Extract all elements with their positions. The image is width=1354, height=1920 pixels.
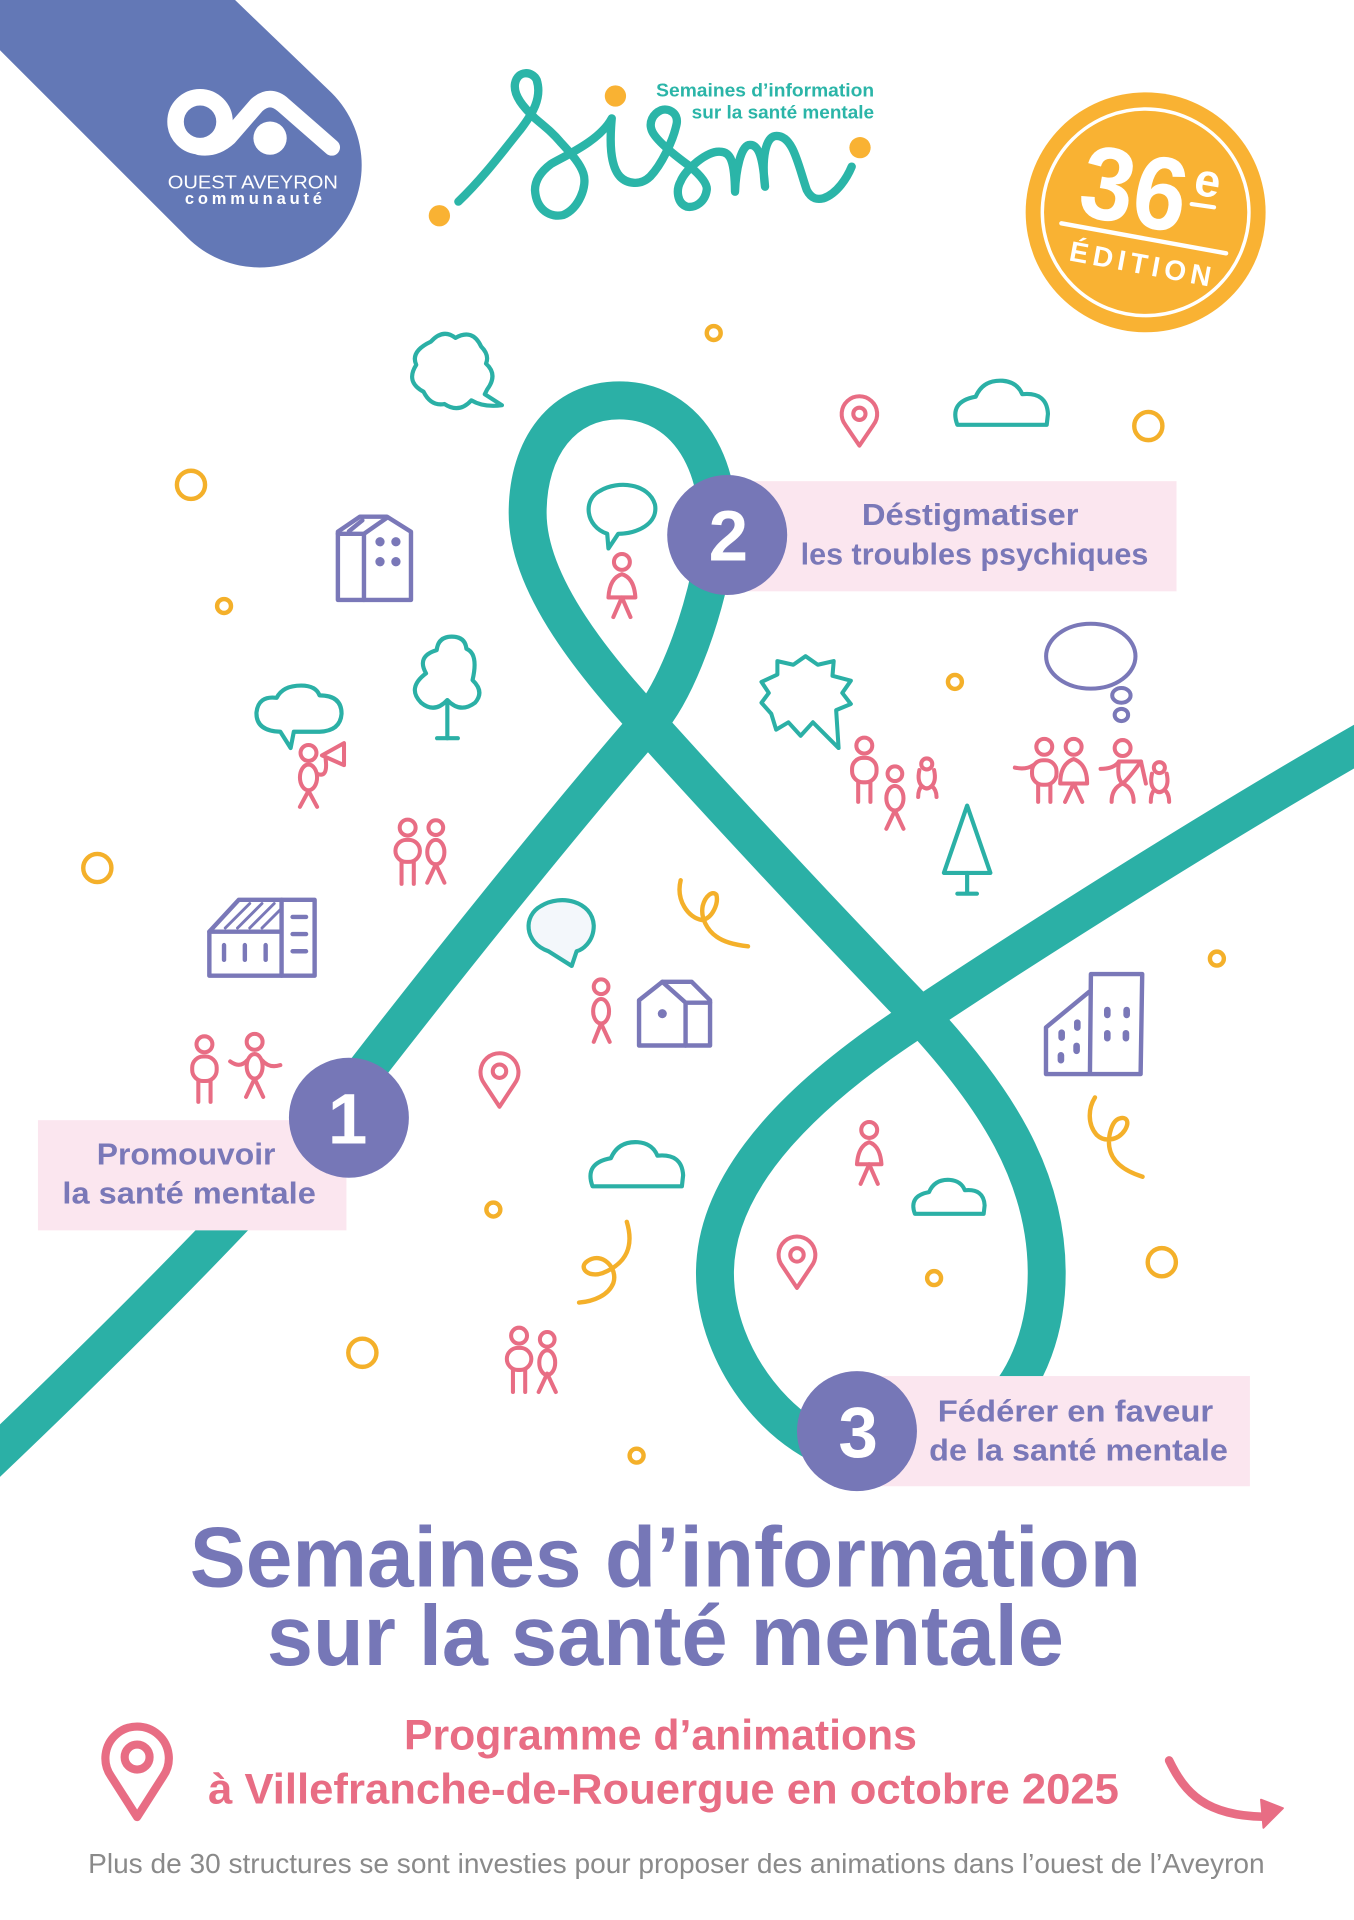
icon: large map pin — [105, 1727, 169, 1817]
badge word: ÉDITION — [1067, 236, 1214, 292]
logo text: Ouest Aveyron: OUEST AVEYRON — [168, 172, 338, 193]
number badge 3 — [797, 1371, 917, 1491]
label 2: déstigmatiser — [727, 481, 1176, 591]
icon: round tree — [415, 637, 479, 738]
label 2 line 2: les troubles psychiques — [801, 537, 1148, 571]
label 1: promouvoir — [38, 1120, 346, 1230]
number badge 2 — [667, 475, 787, 595]
subtitle line 2: à Villefranche-de-Rouergue en octobre 2025 — [208, 1765, 1119, 1813]
label 3 line 1: Fédérer en faveur — [938, 1394, 1213, 1428]
icon: map pin top — [842, 396, 877, 446]
icon: cloud top right — [955, 381, 1048, 425]
badge superscript: e — [1191, 153, 1225, 208]
icon: map pin centre — [481, 1053, 518, 1107]
people: family of four — [1015, 739, 1169, 802]
icon: spiky speech bubble — [761, 656, 851, 748]
arrow: curved pink — [1169, 1760, 1283, 1828]
number badge 3: 3 — [838, 1394, 878, 1473]
label 1 line 2: la santé mentale — [62, 1176, 316, 1210]
icon: speech cloud top — [412, 334, 502, 408]
icon: purple building — [338, 517, 411, 600]
SISM tagline line 1: Semaines d’information — [656, 80, 874, 101]
icon: factory — [209, 900, 315, 976]
person: next to house — [593, 979, 610, 1042]
logo text: communauté: communauté — [185, 189, 322, 208]
icon: Ouest Aveyron mark — [176, 97, 332, 155]
people: pair upper left — [395, 820, 444, 884]
badge: 36e édition — [1026, 92, 1266, 332]
ribbon: teal figure-eight path — [0, 400, 1354, 1474]
icon: purple tall building — [1046, 974, 1142, 1074]
number badge 1 — [289, 1058, 409, 1178]
icon: house — [639, 982, 710, 1046]
title line 1: Semaines d’information — [190, 1510, 1141, 1606]
label 1 line 1: Promouvoir — [97, 1137, 276, 1171]
icon: yellow squiggle right — [1090, 1097, 1143, 1177]
label 3: fédérer — [857, 1376, 1250, 1486]
people: pair left of badge 1 — [192, 1034, 280, 1102]
label 2 line 1: Déstigmatiser — [862, 498, 1079, 532]
people: pair bottom — [507, 1328, 556, 1392]
icon: cloud lower loop — [913, 1180, 985, 1214]
icon: triangular tree — [944, 806, 990, 894]
title line 2: sur la santé mentale — [267, 1588, 1064, 1684]
footer note: Plus de 30 structures se sont investies pour proposer des animations dans l’ouest de l’Aveyron — [88, 1848, 1265, 1879]
SISM tagline line 2: sur la santé mentale — [692, 101, 874, 122]
icon: cloud centre — [590, 1142, 683, 1186]
people: family of three — [852, 738, 937, 829]
decorative yellow rings — [83, 326, 1224, 1463]
SISM logo — [429, 73, 874, 226]
subtitle line 1: Programme d’animations — [404, 1711, 917, 1759]
person: woman lower loop — [857, 1122, 881, 1184]
icon: speech cloud left — [256, 686, 342, 748]
person: woman in loop — [608, 554, 635, 617]
label 3 line 2: de la santé mentale — [929, 1434, 1228, 1468]
icon: speech bubble in loop — [589, 485, 655, 548]
icon: speech bubble on ribbon — [529, 900, 594, 966]
number badge 2: 2 — [709, 498, 748, 577]
number badge 1: 1 — [328, 1080, 367, 1159]
person: with megaphone — [300, 743, 344, 807]
script lettering stroke — [458, 73, 852, 216]
icon: yellow squiggle centre — [680, 880, 748, 946]
icon: thought bubble — [1046, 624, 1135, 721]
icon: yellow squiggle lower — [579, 1222, 630, 1303]
badge number: 36 — [1072, 123, 1197, 256]
icon: map pin lower loop — [779, 1236, 815, 1288]
logo panel: Ouest Aveyron — [0, 0, 362, 267]
